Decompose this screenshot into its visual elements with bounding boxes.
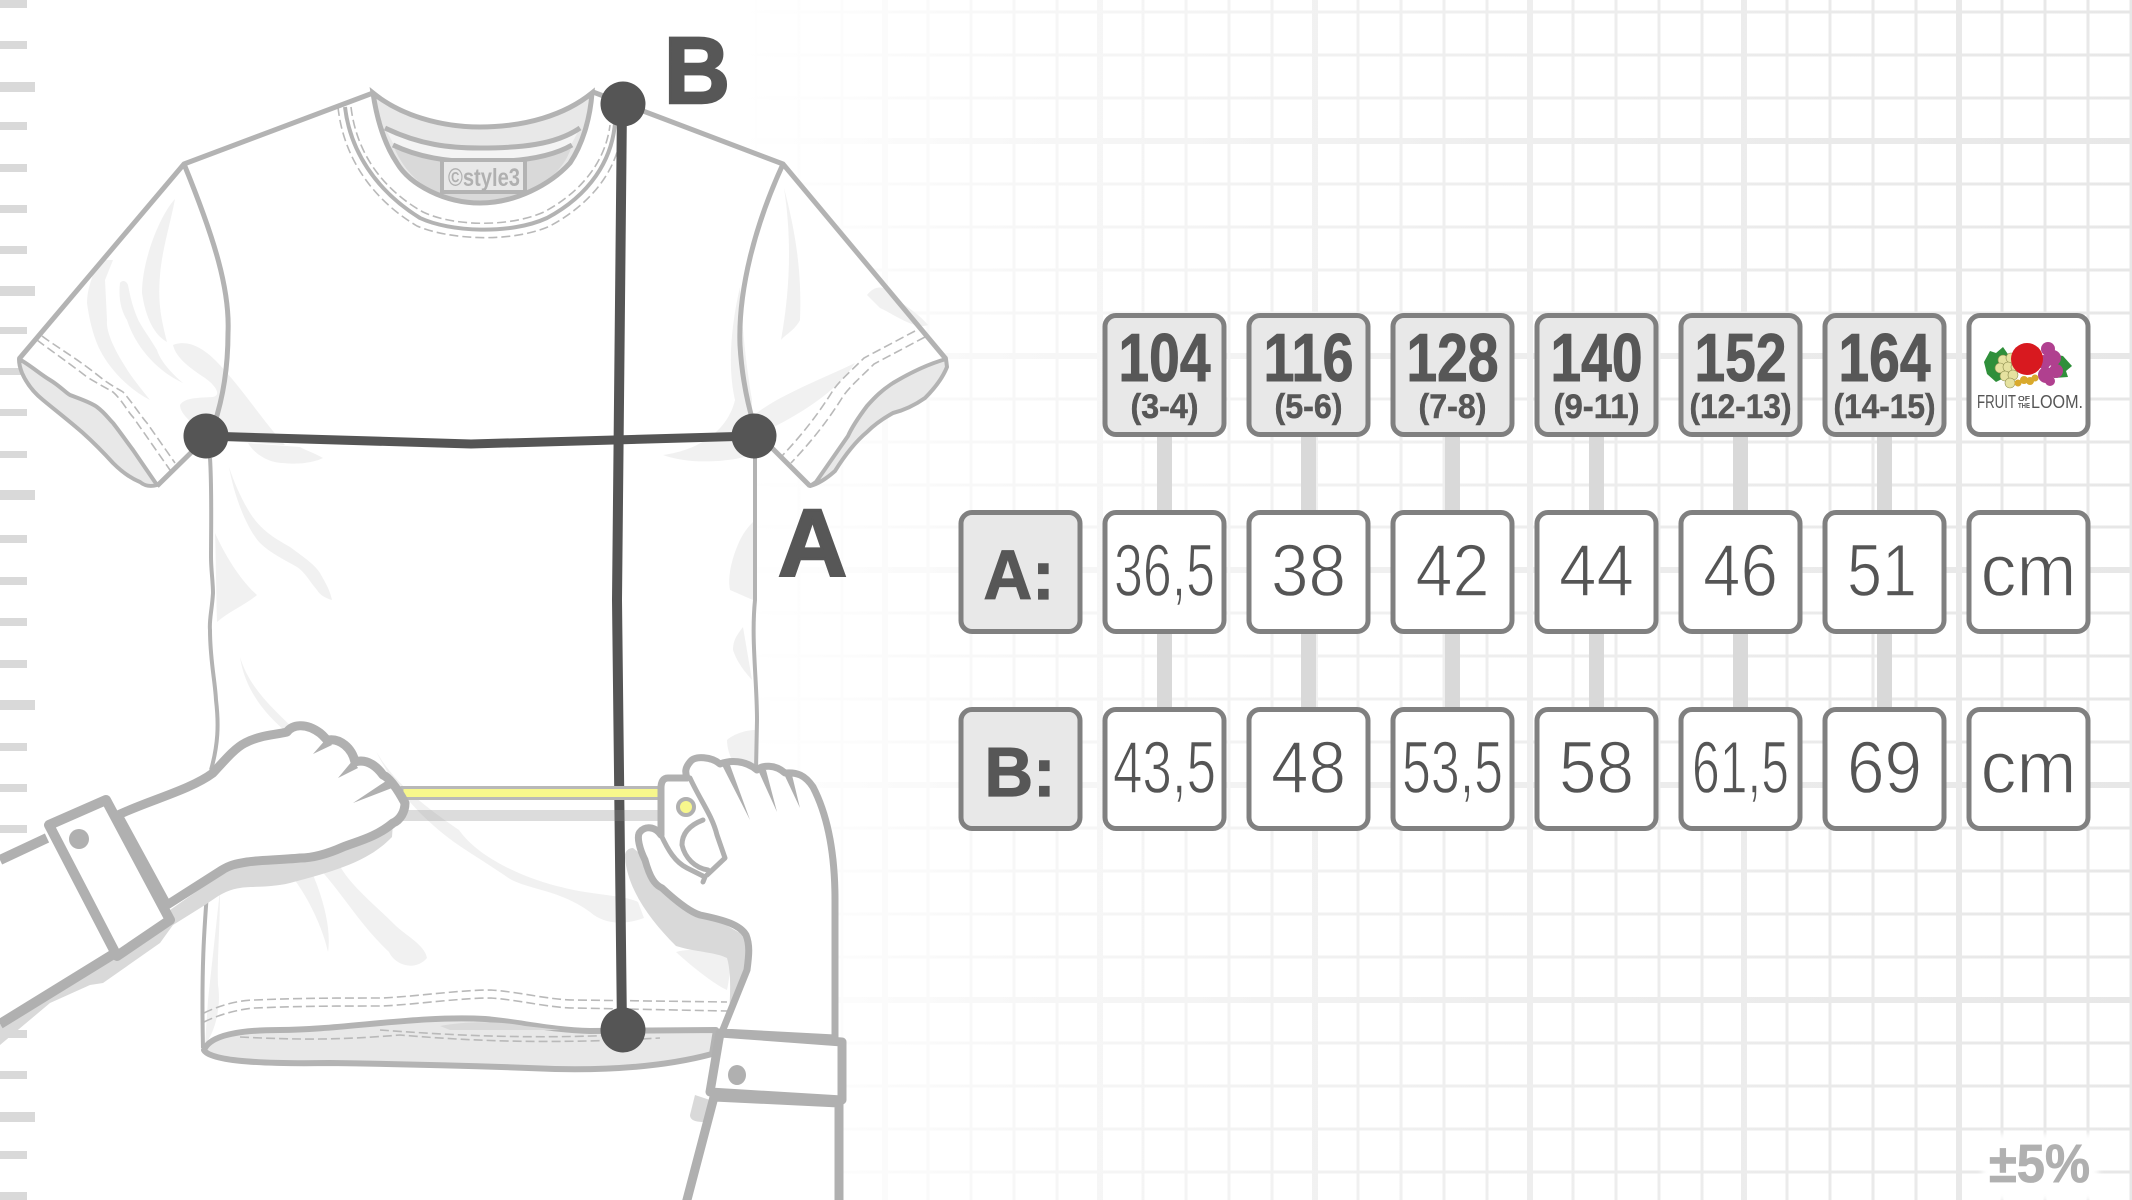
brand logo: FRUIT (1977, 392, 2016, 412)
measure line A (184, 414, 776, 458)
measure line B (600, 82, 646, 1052)
shirt wrinkles (87, 188, 928, 1045)
A values: 42 (1416, 529, 1490, 612)
B values: 58 (1559, 726, 1634, 809)
left sleeve (0, 838, 112, 1022)
A values: 51 (1847, 529, 1917, 612)
size 152 (1681, 316, 1800, 434)
collar rib (345, 107, 615, 230)
size 104: (3-4) (1130, 388, 1198, 426)
size 164 (1825, 316, 1944, 434)
body sides (202, 450, 757, 1048)
hand shadows (0, 823, 752, 1122)
left fist knuckles (313, 738, 392, 803)
row label A (961, 512, 1080, 632)
size 104: 104 (1118, 320, 1211, 396)
size 116 (1249, 316, 1368, 434)
left cuff button (69, 829, 89, 849)
size 152: (12-13) (1690, 388, 1792, 426)
left hand (0, 726, 405, 1024)
row label A: A: (984, 536, 1054, 614)
B values: cm (1980, 726, 2076, 809)
collar inside (373, 93, 592, 203)
right cuff button (728, 1065, 746, 1085)
size 104 (1105, 316, 1224, 434)
right hand (638, 758, 842, 1200)
label B: B (664, 18, 730, 124)
brand logo: THE (2018, 403, 2030, 410)
left cuff (49, 800, 170, 956)
measuring tape (402, 788, 662, 798)
label A: A (778, 490, 847, 597)
size 140: 140 (1550, 320, 1642, 396)
size 164: (14-15) (1834, 388, 1936, 426)
shirt silhouette (19, 92, 946, 1069)
row label B (961, 710, 1080, 828)
right sleeve (683, 1097, 839, 1200)
B values: 43,5 (1113, 726, 1216, 809)
t-shirt (19, 92, 947, 1069)
header row: sizes (1105, 316, 2088, 434)
A values (1105, 512, 2088, 632)
size 140 (1537, 316, 1656, 434)
B values: 61,5 (1692, 726, 1789, 809)
right arm and hand (638, 758, 835, 1038)
size 128: (7-8) (1418, 388, 1486, 426)
A values: 44 (1559, 529, 1634, 612)
size 116: (5-6) (1274, 388, 1342, 426)
size 164: 164 (1838, 320, 1931, 396)
brand logo (1969, 316, 2088, 434)
B values: 53,5 (1402, 726, 1503, 809)
row label B: B: (984, 733, 1056, 811)
neck label: ©style3 (448, 164, 520, 192)
row A (961, 512, 2088, 632)
B values (1105, 710, 2088, 828)
brand logo: LOOM. (2031, 392, 2083, 412)
size 128: 128 (1406, 320, 1498, 396)
connector stems (1157, 437, 1892, 707)
size chart (961, 316, 2088, 828)
brand logo: OF (2018, 396, 2031, 403)
size 152: 152 (1694, 320, 1786, 396)
sleeve openings (19, 359, 947, 486)
left fist (118, 726, 405, 905)
tolerance note: ±5% (1989, 1134, 2090, 1194)
stitching (37, 107, 925, 1022)
shirt outline (19, 92, 946, 486)
hem (204, 1018, 716, 1069)
size 128 (1393, 316, 1512, 434)
right hand fingers (661, 778, 725, 882)
ruler ticks (0, 0, 35, 1200)
A values: 36,5 (1114, 529, 1215, 612)
size 116: 116 (1264, 320, 1354, 396)
right cuff (710, 1033, 842, 1100)
A values: cm (1980, 529, 2076, 612)
tape shadow (402, 810, 660, 821)
A values: 38 (1271, 529, 1346, 612)
A values: 46 (1703, 529, 1778, 612)
tape end dot (678, 799, 694, 815)
B values: 48 (1271, 726, 1346, 809)
B values: 69 (1847, 726, 1922, 809)
row B (961, 710, 2088, 828)
size 140: (9-11) (1554, 388, 1640, 426)
